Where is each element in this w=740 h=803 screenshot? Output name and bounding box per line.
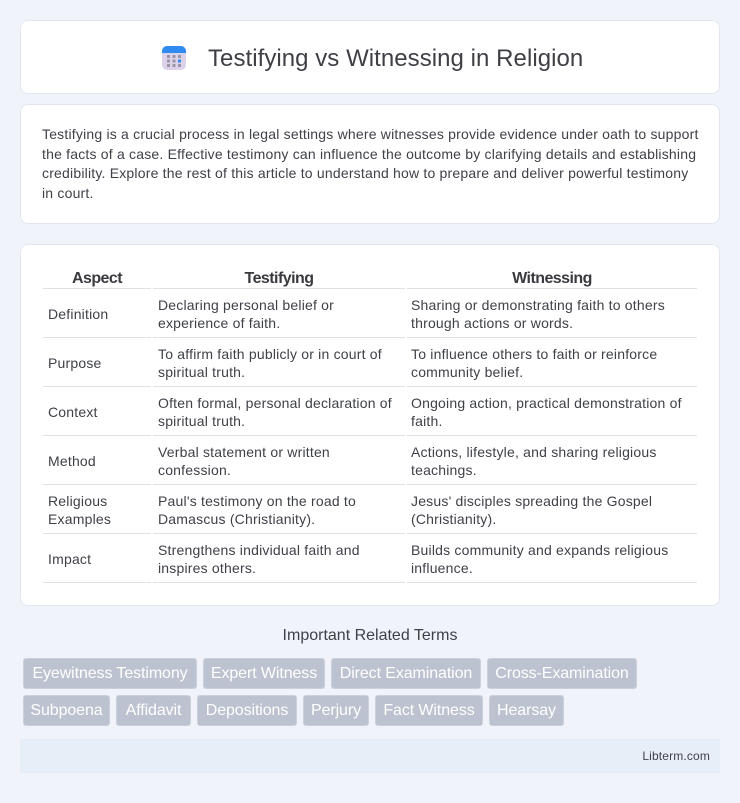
comparison table: To affirm faith publicly or in court of — [158, 346, 382, 362]
intro text: the facts of a case. Effective testimony can influence the outcome by clarifying details and establishing — [42, 146, 696, 162]
row: purpose: Purpose — [48, 355, 102, 371]
comparison table: To influence others to faith or reinforce — [411, 346, 657, 362]
comparison table: through actions or words. — [411, 315, 573, 331]
comparison table: spiritual truth. — [158, 413, 245, 429]
related term tags: Affidavit — [126, 702, 181, 719]
header: testifying: Testifying — [245, 270, 313, 287]
comparison table: faith. — [411, 413, 443, 429]
intro card — [20, 104, 720, 224]
related term tags: Depositions — [206, 702, 288, 719]
related term tags: Fact Witness — [383, 702, 475, 719]
related term tags: Hearsay — [497, 702, 556, 719]
header: aspect: Aspect — [72, 270, 122, 287]
comparison table: teachings. — [411, 462, 477, 478]
comparison table: spiritual truth. — [158, 364, 245, 380]
footer credit: Libterm.com — [642, 749, 710, 763]
related term tags: Cross-Examination — [495, 665, 629, 682]
intro text — [42, 126, 699, 200]
comparison table: Paul's testimony on the road to — [158, 493, 356, 509]
row: impact: Impact — [48, 551, 91, 567]
icon: calendar — [162, 46, 186, 70]
comparison table: Often formal, personal declaration of — [158, 395, 392, 411]
comparison table: Builds community and expands religious — [411, 542, 668, 558]
row: method: Method — [48, 453, 96, 469]
row: religious examples: Religious — [48, 493, 107, 509]
related term tags: Eyewitness Testimony — [32, 665, 188, 682]
comparison table: confession. — [158, 462, 231, 478]
related terms heading: Important Related Terms — [283, 627, 457, 644]
comparison table: Actions, lifestyle, and sharing religious — [411, 444, 657, 460]
header: witnessing: Witnessing — [512, 270, 592, 287]
row: religious examples: Examples — [48, 511, 111, 527]
comparison table: (Christianity). — [411, 511, 496, 527]
footer bar — [20, 739, 720, 773]
related term tags: Direct Examination — [340, 665, 472, 682]
comparison table: Sharing or demonstrating faith to others — [411, 297, 665, 313]
related term tags: Expert Witness — [211, 665, 317, 682]
comparison table: influence. — [411, 560, 473, 576]
header card — [20, 20, 720, 94]
related term tags: Perjury — [311, 702, 361, 719]
intro text: credibility. Explore the rest of this article to understand how to prepare and deliver powerful testimony — [42, 165, 688, 181]
comparison table: inspires others. — [158, 560, 256, 576]
intro text: in court. — [42, 184, 94, 200]
row: religious examples — [48, 493, 111, 527]
comparison table: Verbal statement or written — [158, 444, 330, 460]
comparison table: Jesus' disciples spreading the Gospel — [411, 493, 652, 509]
table panel — [20, 244, 720, 606]
related term tags — [23, 658, 637, 726]
row: context: Context — [48, 404, 98, 420]
comparison table: Damascus (Christianity). — [158, 511, 315, 527]
intro text: Testifying is a crucial process in legal settings where witnesses provide evidence under oath to support — [42, 126, 699, 142]
comparison table: community belief. — [411, 364, 523, 380]
comparison table: Ongoing action, practical demonstration of — [411, 395, 682, 411]
comparison table: experience of faith. — [158, 315, 280, 331]
related term tags: Subpoena — [30, 702, 103, 719]
comparison table: Strengthens individual faith and — [158, 542, 360, 558]
comparison table: Declaring personal belief or — [158, 297, 334, 313]
title: Testifying vs Witnessing in Religion — [208, 45, 583, 72]
row: definition: Definition — [48, 306, 108, 322]
